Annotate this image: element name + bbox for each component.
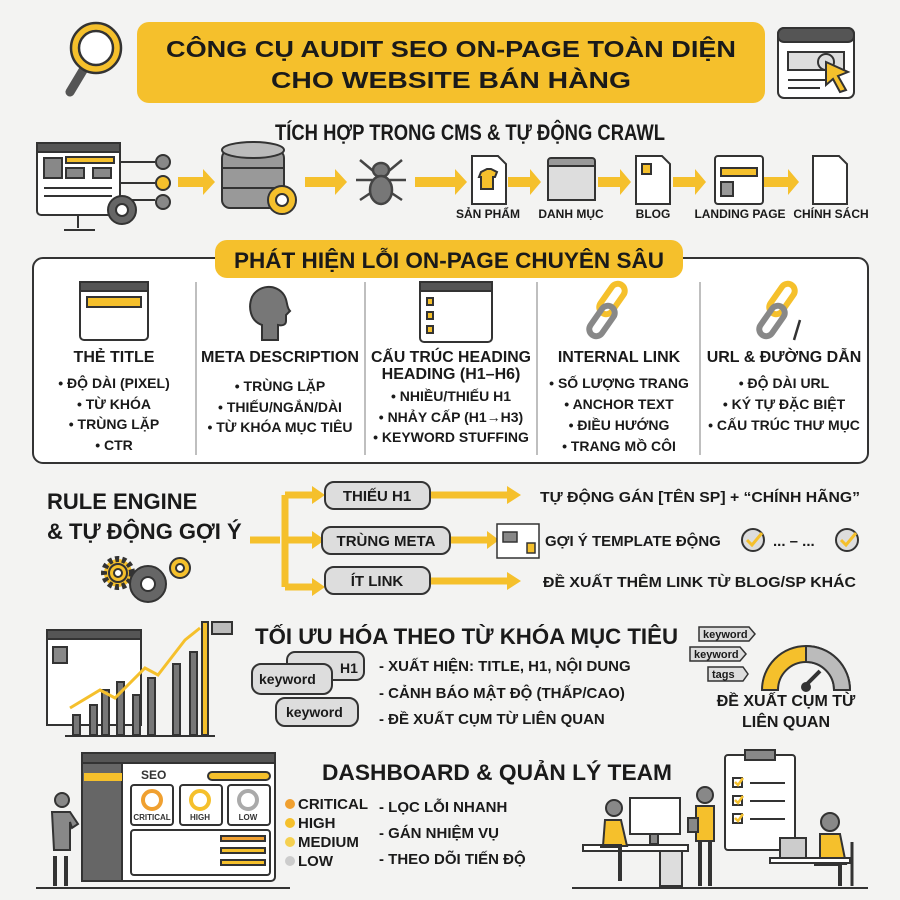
panel: on-page errors [33,240,868,463]
legend: LOW [298,853,334,870]
header pill: PHÁT HIỆN LỖI ON-PAGE CHUYÊN SÂU [234,247,664,273]
title banner [137,22,765,103]
keyword bubbles: keyword [259,671,316,687]
keyword bullets: - ĐỀ XUẤT CỤM TỪ LIÊN QUAN [379,710,605,728]
keyword bullets: - XUẤT HIỆN: TITLE, H1, NỘI DUNG [379,657,631,675]
heading: rule engine: RULE ENGINE [47,489,197,514]
labels: page types: CHÍNH SÁCH [793,206,869,221]
column texts: • TRANG MỒ CÔI [562,437,676,454]
labels: page types: DANH MỤC [538,207,604,221]
text: TRÙNG META [337,532,436,550]
rule results: TỰ ĐỘNG GÁN [TÊN SP] + “CHÍNH HÃNG” [540,488,860,506]
column texts: • TỪ KHÓA MỤC TIÊU [207,418,353,435]
text: CRITICAL [133,813,171,822]
rule pills [322,482,450,594]
column texts: • CTR [95,437,133,453]
dashboard bullets: - THEO DÕI TIẾN ĐỘ [379,850,526,868]
rule results: GỢI Ý TEMPLATE ĐỘNG [545,532,721,550]
icon: magnifier [70,23,121,92]
column texts: • KEYWORD STUFFING [373,429,529,445]
arrows: crawl flow [178,169,799,195]
header pill [215,240,683,278]
column texts: INTERNAL LINK [558,349,681,366]
dashboard screen [82,753,275,881]
labels: page types [456,206,869,221]
column texts: • TRÙNG LẶP [69,415,159,432]
column texts: • TỪ KHÓA [77,395,151,412]
icon: database [222,142,296,214]
labels: page types: SẢN PHẨM [456,206,520,221]
keyword bubbles [252,652,364,726]
labels: page types: BLOG [636,207,670,221]
legend: MEDIUM [298,834,359,851]
icons: checks [742,529,858,551]
title banner: CÔNG CỤ AUDIT SEO ON-PAGE TOÀN DIỆN [166,35,736,62]
team illustration [583,750,852,886]
column texts: • THIẾU/NGẮN/DÀI [218,398,342,415]
person presenting [52,793,78,886]
dashboard bullets [379,798,526,868]
icon: template [497,524,539,558]
keyword bubbles: H1 [340,660,358,676]
rule results: ĐỀ XUẤT THÊM LINK TỪ BLOG/SP KHÁC [543,573,856,591]
tags: tags [712,669,735,681]
keyword bubbles: keyword [286,704,343,720]
icon: spider [356,160,406,204]
column texts: • ANCHOR TEXT [564,396,674,412]
icon: CMS monitor [37,143,170,230]
heading: rule engine [47,489,242,544]
title banner: CHO WEBSITE BÁN HÀNG [271,66,631,93]
dashboard bullets: - GÁN NHIỆM VỤ [379,824,499,842]
keyword bullets [379,657,631,728]
column texts: • ĐỘ DÀI (PIXEL) [58,374,170,391]
heading: keyword optimization: TỐI ƯU HÓA THEO TỪ KHÓA MỤC TIÊU [255,623,678,649]
text: SEO [141,768,166,782]
text: THIẾU H1 [343,488,411,505]
column texts: URL & ĐƯỜNG DẪN [707,347,861,366]
icon: browser click [778,28,854,98]
column texts: • ĐIỀU HƯỚNG [569,416,670,433]
tags: keyword [703,629,748,641]
heading: CMS crawl: TÍCH HỢP TRONG CMS & TỰ ĐỘNG CRAWL [275,120,665,145]
dashboard bullets: - LỌC LỖI NHANH [379,798,507,816]
text: HIGH [190,813,210,822]
column texts [58,347,861,454]
chart: growth [47,622,232,736]
icons: page types [472,156,847,204]
gauge caption: ĐỀ XUẤT CỤM TỪ [717,691,856,710]
column texts: HEADING (H1–H6) [382,366,520,383]
column texts: • NHIỀU/THIẾU H1 [391,388,511,404]
column texts: • SỐ LƯỢNG TRANG [549,374,689,391]
keyword bullets: - CẢNH BÁO MẬT ĐỘ (THẤP/CAO) [379,684,625,702]
column texts: • ĐỘ DÀI URL [739,374,830,391]
icon: gears [104,558,190,602]
gauge [762,646,850,691]
gauge caption: LIÊN QUAN [742,712,830,731]
column texts: META DESCRIPTION [201,349,359,366]
legend: HIGH [298,815,336,832]
text: LOW [239,813,258,822]
column texts: THẺ TITLE [74,347,155,366]
legend [285,796,368,870]
tags [690,627,755,681]
heading: dashboard: DASHBOARD & QUẢN LÝ TEAM [322,760,672,785]
tags: keyword [694,649,739,661]
legend: CRITICAL [298,796,368,813]
labels: page types: LANDING PAGE [694,207,786,221]
rule results [540,488,860,591]
heading: rule engine: & TỰ ĐỘNG GỢI Ý [47,519,242,544]
text: ÍT LINK [351,573,403,590]
rule results: ... – ... [773,533,815,550]
column texts: CẤU TRÚC HEADING [371,347,531,366]
column icons [80,281,800,342]
column texts: • CẤU TRÚC THƯ MỤC [708,416,860,433]
column texts: • NHẢY CẤP (H1→H3) [379,409,523,425]
column texts: • TRÙNG LẶP [235,377,325,394]
arrows: rule branches [250,495,510,587]
column texts: • KÝ TỰ ĐẶC BIỆT [723,395,846,412]
gauge caption [717,691,856,731]
